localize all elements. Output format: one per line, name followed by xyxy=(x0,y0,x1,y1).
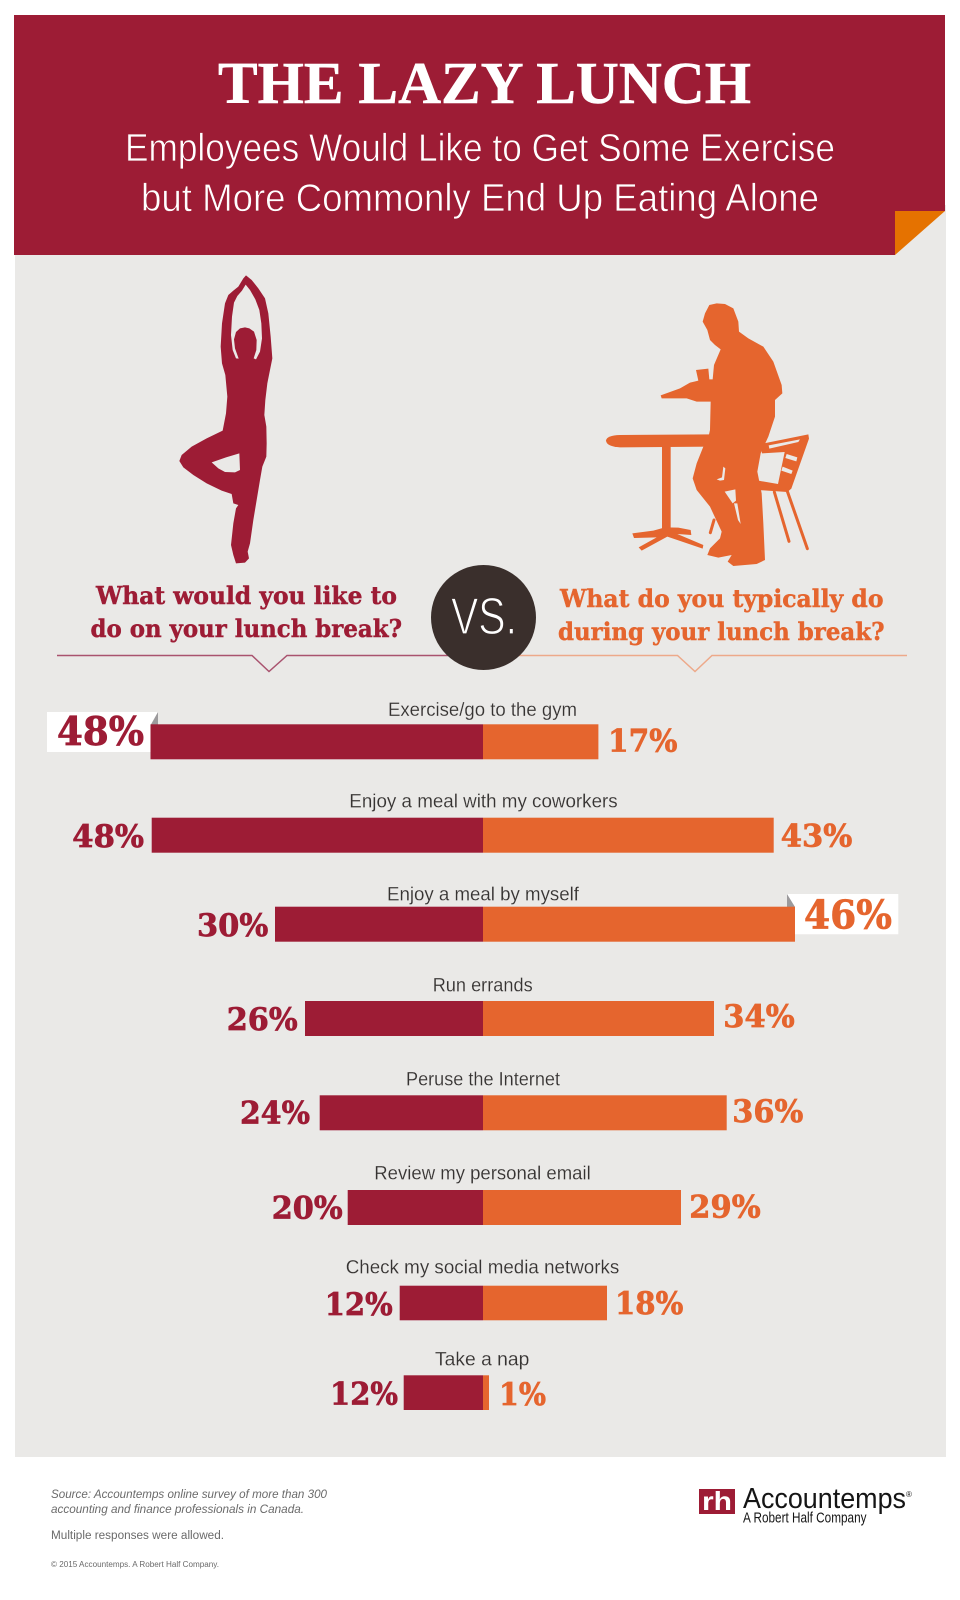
row: Enjoy a meal by myself: Enjoy a meal by myself xyxy=(387,885,580,906)
row: Check my social media networks xyxy=(325,1257,683,1323)
icon: man standing at cafe table xyxy=(606,303,809,566)
table xyxy=(606,434,712,551)
row: Review my personal email: 29% xyxy=(689,1190,761,1226)
left question heading: do on your lunch break? xyxy=(90,614,402,643)
left question heading xyxy=(90,581,402,643)
folded corner xyxy=(895,211,945,255)
gaps between legs xyxy=(717,467,741,524)
row: Review my personal email: 20% xyxy=(272,1191,343,1227)
row: Exercise/go to the gym: 17% xyxy=(608,724,678,760)
right question heading xyxy=(558,584,884,646)
chair xyxy=(710,434,809,549)
row: Exercise/go to the gym xyxy=(47,700,678,760)
banner shape xyxy=(14,15,945,255)
source note: Source: Accountemps online survey of more than 300 xyxy=(51,1489,328,1501)
row: Take a nap xyxy=(330,1350,546,1413)
right divider with pointer xyxy=(515,656,907,672)
row: Enjoy a meal with my coworkers: Enjoy a meal with my coworkers xyxy=(349,792,618,813)
row: Check my social media networks: Check my social media networks xyxy=(346,1257,619,1278)
logo: Accountemps xyxy=(699,1483,912,1527)
right question heading: during your lunch break? xyxy=(558,617,884,646)
row: Enjoy a meal with my coworkers: 48% xyxy=(72,819,144,855)
header banner xyxy=(14,15,945,255)
row: Enjoy a meal by myself: 46% xyxy=(804,892,892,938)
row: Run errands xyxy=(227,976,795,1038)
logo: Accountemps: rh xyxy=(702,1486,732,1516)
row: Check my social media networks: 12% xyxy=(325,1287,393,1323)
man silhouette xyxy=(661,303,782,566)
row: Take a nap: 12% xyxy=(330,1376,398,1412)
row: Run errands: 34% xyxy=(723,999,795,1035)
source note: © 2015 Accountemps. A Robert Half Company. xyxy=(51,1560,219,1569)
row: Take a nap: 1% xyxy=(499,1377,546,1413)
row: Enjoy a meal with my coworkers xyxy=(72,792,852,855)
row: Enjoy a meal with my coworkers: 43% xyxy=(781,819,852,855)
row: Enjoy a meal by myself: 30% xyxy=(197,908,268,944)
VS badge: VS. xyxy=(451,588,517,646)
subtitle line 1: Employees Would Like to Get Some Exercise xyxy=(125,127,835,170)
row: Exercise/go to the gym: 48% xyxy=(57,709,144,755)
row: Peruse the Internet xyxy=(240,1070,803,1131)
source note xyxy=(51,1489,328,1569)
title: THE LAZY LUNCH xyxy=(218,50,751,116)
logo: Accountemps: A Robert Half Company xyxy=(743,1510,867,1527)
row: Peruse the Internet: 24% xyxy=(240,1095,310,1131)
row: Exercise/go to the gym: Exercise/go to the gym xyxy=(388,700,577,721)
icon: yoga figure in tree pose xyxy=(179,275,272,563)
background panel xyxy=(15,205,946,1457)
row: Check my social media networks: 18% xyxy=(615,1286,683,1322)
row: Peruse the Internet: 36% xyxy=(732,1094,803,1130)
logo: Accountemps: Accountemps xyxy=(743,1483,906,1515)
VS badge xyxy=(431,565,536,670)
row: Enjoy a meal by myself xyxy=(197,885,898,944)
left divider with pointer xyxy=(57,656,452,672)
subtitle line 2: but More Commonly End Up Eating Alone xyxy=(141,177,819,220)
left question heading: What would you like to xyxy=(95,581,397,610)
row: Run errands: Run errands xyxy=(433,976,533,997)
right question heading: What do you typically do xyxy=(559,584,884,613)
source note: accounting and finance professionals in Canada. xyxy=(51,1504,304,1516)
row: Take a nap: Take a nap xyxy=(435,1350,529,1371)
row: Peruse the Internet: Peruse the Internet xyxy=(406,1070,561,1091)
logo: Accountemps: ® xyxy=(906,1490,912,1499)
row: Review my personal email xyxy=(272,1164,761,1227)
source note: Multiple responses were allowed. xyxy=(51,1530,224,1542)
row: Review my personal email: Review my personal email xyxy=(374,1164,591,1185)
row: Run errands: 26% xyxy=(227,1002,298,1038)
